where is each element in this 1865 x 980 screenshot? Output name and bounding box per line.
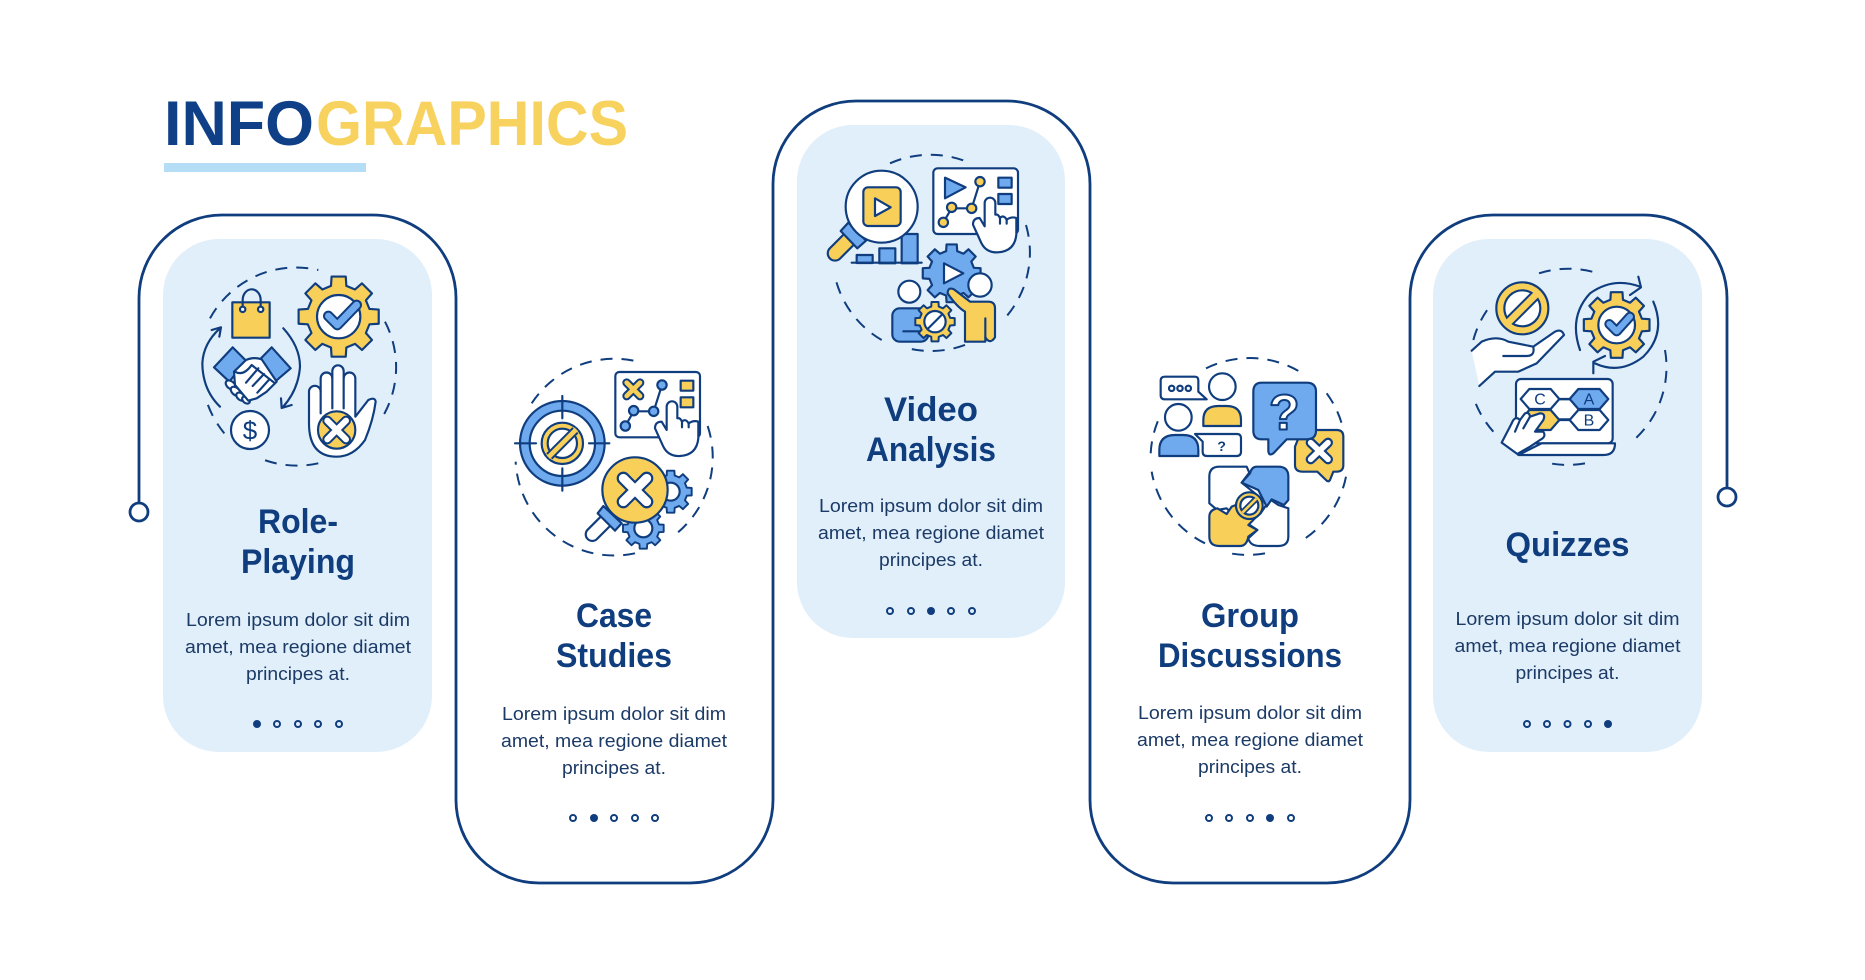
body text: principes at. [246, 663, 350, 684]
body text: Lorem ipsum dolor sit dim [186, 609, 410, 630]
title: GRAPHICS [316, 89, 628, 159]
body text [501, 703, 727, 778]
heading: Case [576, 597, 652, 635]
heading: Group [1201, 597, 1299, 635]
icon: quizzes: C [1534, 392, 1546, 409]
pagination dots [253, 720, 342, 728]
pagination dots [1524, 720, 1612, 728]
heading: Analysis [866, 431, 996, 469]
icon: quizzes: A [1584, 392, 1595, 409]
body text [1137, 702, 1363, 777]
pagination dots [887, 607, 975, 615]
body text: Lorem ipsum dolor sit dim [502, 703, 726, 724]
icon: role-playing [202, 267, 396, 466]
icon: quizzes: B [1584, 413, 1594, 430]
heading [1158, 597, 1342, 675]
title: INFO [164, 89, 314, 159]
heading: Studies [556, 637, 672, 675]
card background [163, 239, 432, 752]
panel: video analysis [797, 125, 1065, 638]
body text [818, 495, 1044, 570]
body text [1454, 608, 1680, 683]
heading [241, 503, 355, 581]
heading: Video [884, 391, 978, 429]
body text: Lorem ipsum dolor sit dim [1456, 608, 1680, 629]
panel: role-playing [163, 239, 432, 752]
heading: Discussions [1158, 637, 1342, 675]
panel: quizzes [1433, 239, 1702, 752]
body text: principes at. [879, 549, 983, 570]
icon: group discussions: ? [1217, 438, 1226, 454]
body text [185, 609, 411, 684]
body text: principes at. [1516, 662, 1620, 683]
body text: principes at. [562, 757, 666, 778]
panel: case studies [501, 359, 727, 822]
pagination dots [570, 814, 658, 822]
body text: Lorem ipsum dolor sit dim [1138, 702, 1362, 723]
pagination dots [1206, 814, 1294, 822]
body text: amet, mea regione diamet [1454, 635, 1680, 656]
body text: Lorem ipsum dolor sit dim [819, 495, 1043, 516]
icon: quizzes [1472, 269, 1666, 465]
card background [1433, 239, 1702, 752]
icon: group discussions: ? [1269, 384, 1300, 440]
body text: principes at. [1198, 756, 1302, 777]
heading [556, 597, 672, 675]
connector outline [130, 101, 1736, 883]
card background [797, 125, 1065, 638]
panel: group discussions [1137, 358, 1363, 822]
icon: role-playing: $ [243, 415, 258, 445]
body text: amet, mea regione diamet [501, 730, 727, 751]
heading: Playing [241, 543, 355, 581]
body text: amet, mea regione diamet [1137, 729, 1363, 750]
heading [866, 391, 996, 469]
icon: case studies [515, 359, 713, 556]
heading: Quizzes [1506, 526, 1630, 564]
icon: group discussions [1151, 358, 1346, 555]
body text: amet, mea regione diamet [185, 636, 411, 657]
body text: amet, mea regione diamet [818, 522, 1044, 543]
icon: video analysis [835, 155, 1030, 351]
title [164, 89, 628, 172]
heading: Role- [258, 503, 338, 541]
